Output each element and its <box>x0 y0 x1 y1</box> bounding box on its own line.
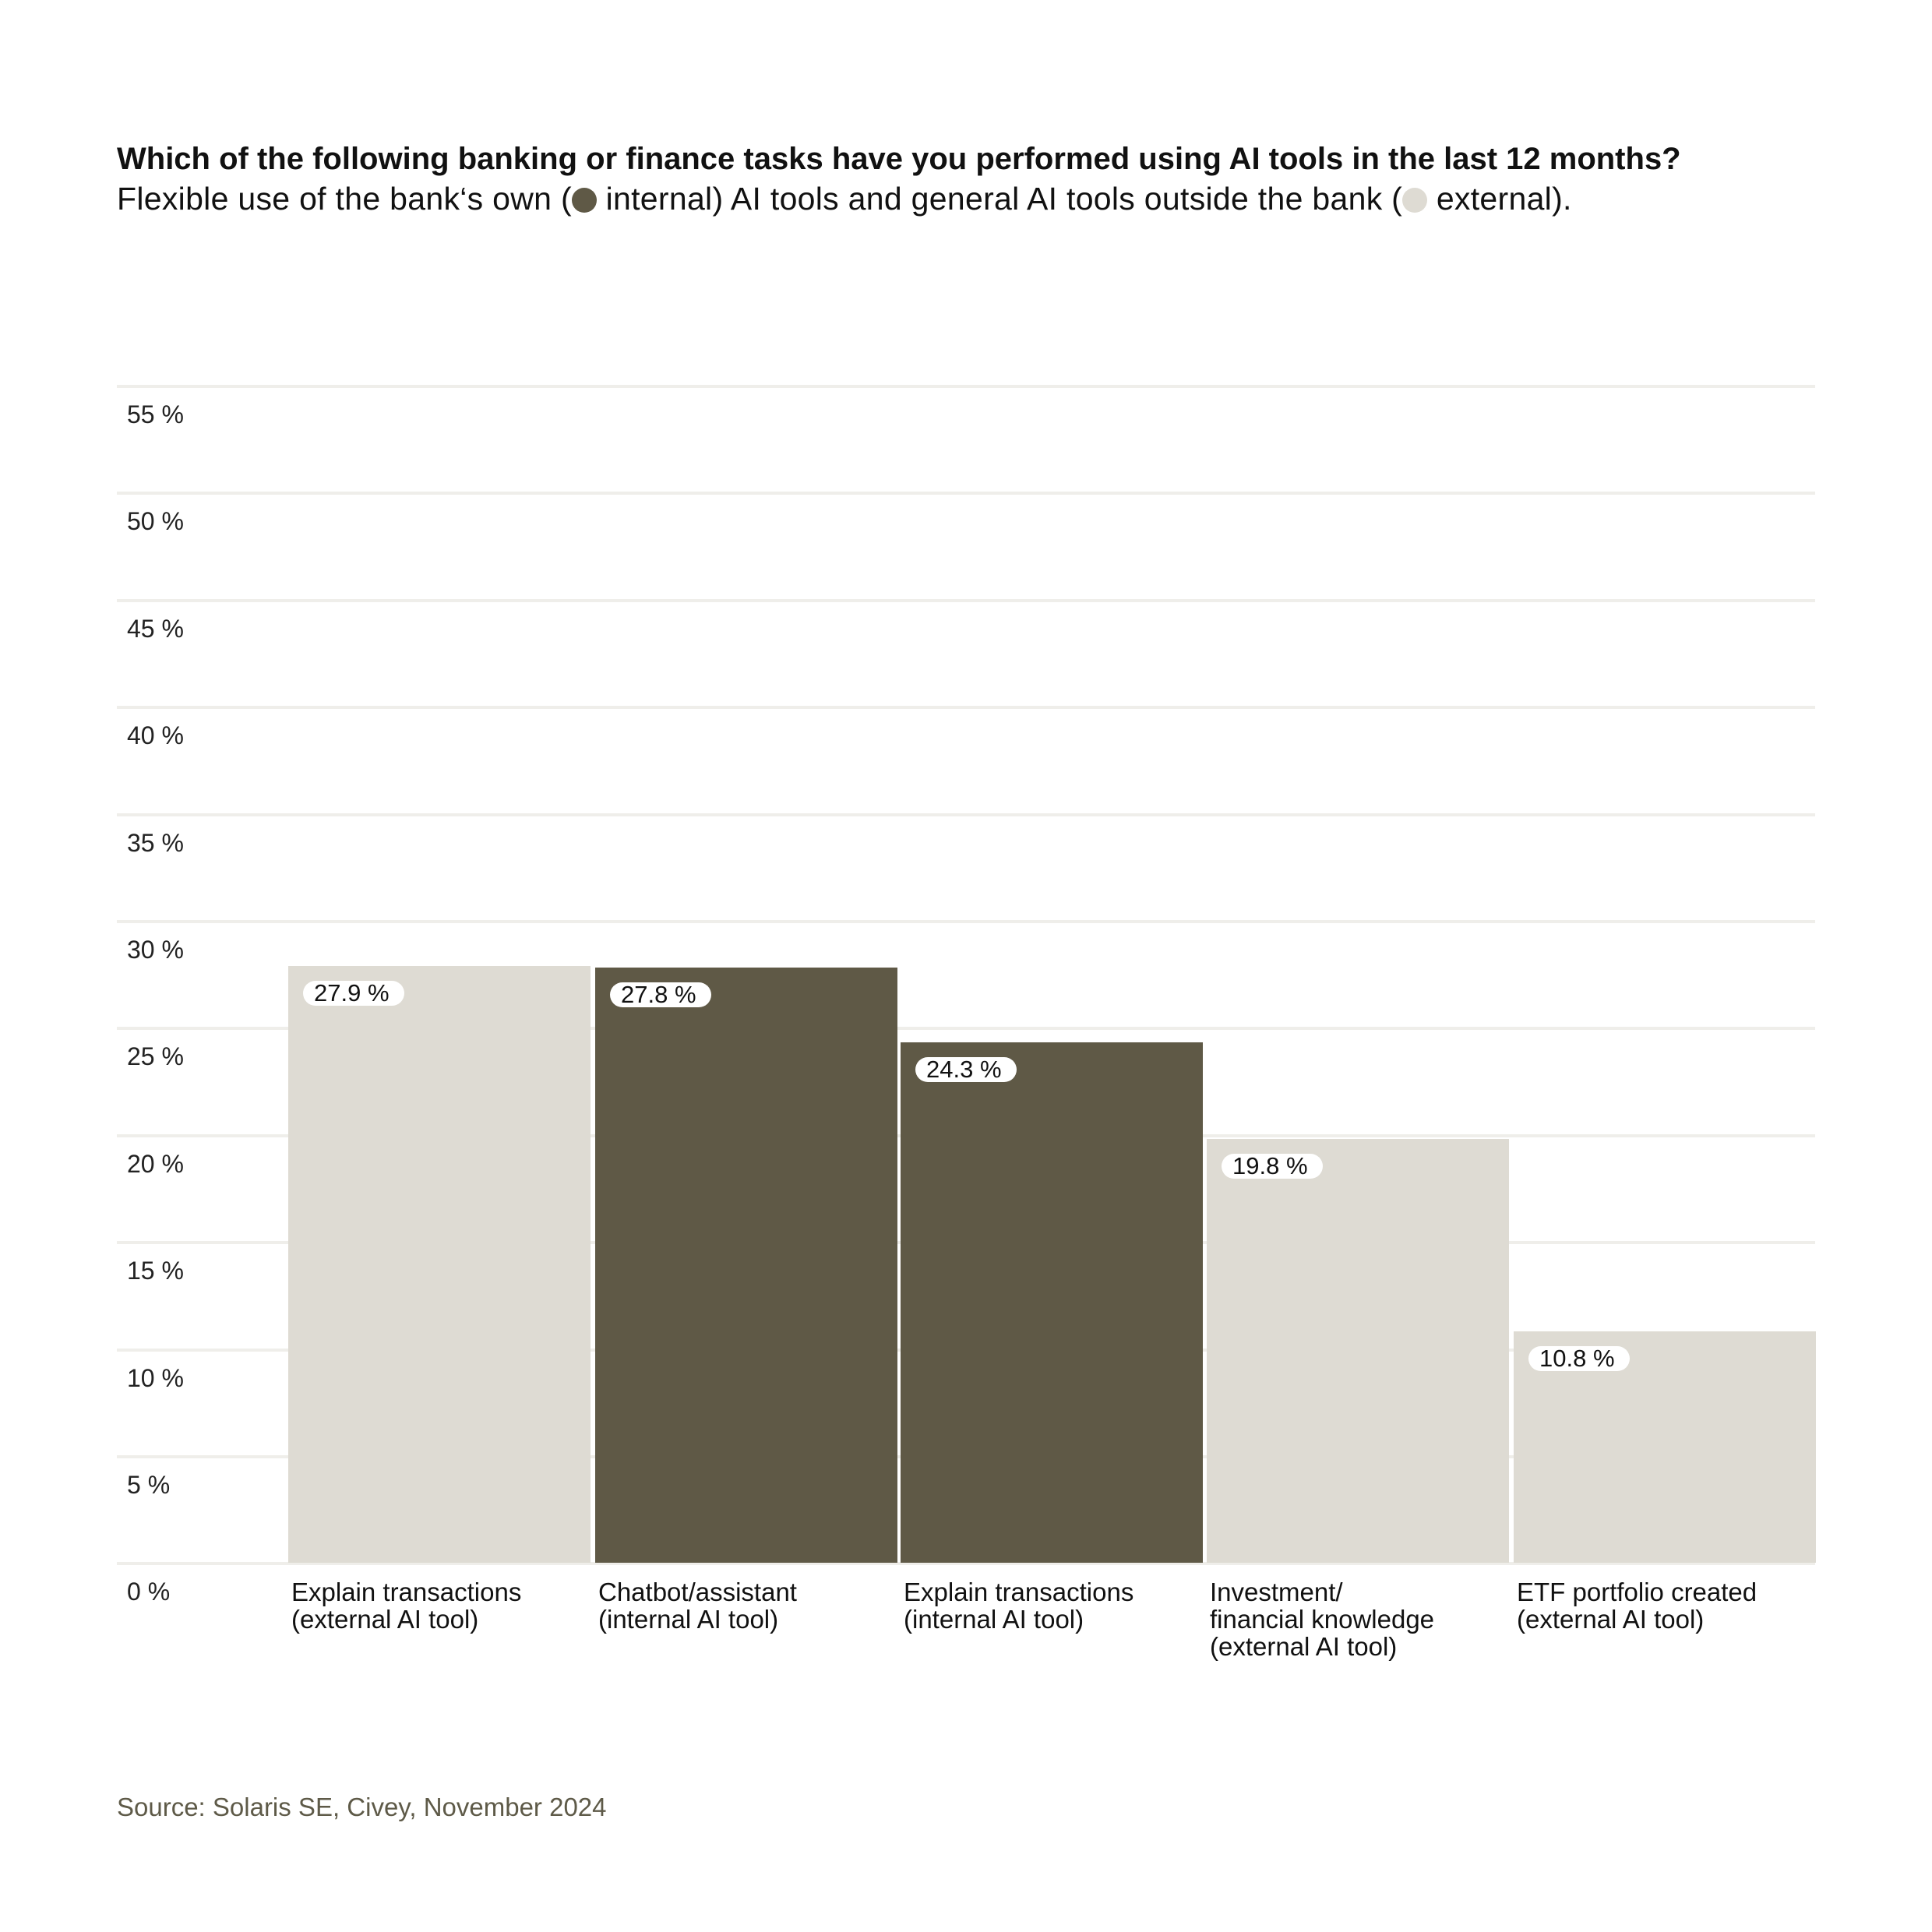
bar: chatbot internal: 27.8 % <box>621 981 696 1008</box>
bar: ETF portfolio external <box>1514 1331 1816 1563</box>
category labels: (internal AI tool) <box>904 1605 1084 1634</box>
bar: ETF portfolio external: 10.8 % <box>1539 1345 1615 1372</box>
category labels: financial knowledge <box>1210 1605 1434 1634</box>
y axis labels: 20 % <box>127 1150 184 1178</box>
y axis labels: 55 % <box>127 400 184 428</box>
category labels <box>291 1578 1757 1661</box>
y axis labels: 45 % <box>127 615 184 643</box>
source: Source: Solaris SE, Civey, November 2024 <box>117 1793 606 1821</box>
y axis labels: 25 % <box>127 1042 184 1070</box>
bar: explain transactions external <box>288 966 591 1563</box>
category labels: Explain transactions <box>291 1578 521 1606</box>
category labels: Investment/ <box>1210 1578 1343 1606</box>
category labels: ETF portfolio created <box>1517 1578 1757 1606</box>
category labels: (external AI tool) <box>291 1605 478 1634</box>
title: Which of the following banking or finance tasks have you performed using AI tools in the last 12 months? <box>117 142 1681 176</box>
y axis labels: 5 % <box>127 1471 170 1499</box>
y axis labels: 10 % <box>127 1364 184 1392</box>
category labels: (internal AI tool) <box>598 1605 778 1634</box>
bar: chatbot internal <box>595 968 897 1563</box>
subtitle with legend: Flexible use of the bank‘s own ( internal) AI tools and general AI tools outside the bank ( external). <box>117 181 1572 217</box>
bar: explain transactions internal: 24.3 % <box>926 1056 1002 1083</box>
bar: explain transactions external: 27.9 % <box>314 979 390 1007</box>
bar: explain transactions internal <box>901 1042 1203 1563</box>
y axis labels: 50 % <box>127 507 184 535</box>
bar: investment knowledge external <box>1207 1139 1509 1563</box>
y axis labels: 15 % <box>127 1257 184 1285</box>
category labels: Explain transactions <box>904 1578 1133 1606</box>
y axis labels: 0 % <box>127 1578 170 1606</box>
y axis labels <box>127 400 184 1606</box>
y axis labels: 30 % <box>127 936 184 964</box>
category labels: Chatbot/assistant <box>598 1578 797 1606</box>
category labels: (external AI tool) <box>1210 1632 1397 1661</box>
y axis labels: 40 % <box>127 721 184 749</box>
category labels: (external AI tool) <box>1517 1605 1704 1634</box>
bar: investment knowledge external: 19.8 % <box>1232 1152 1308 1179</box>
y axis labels: 35 % <box>127 829 184 857</box>
